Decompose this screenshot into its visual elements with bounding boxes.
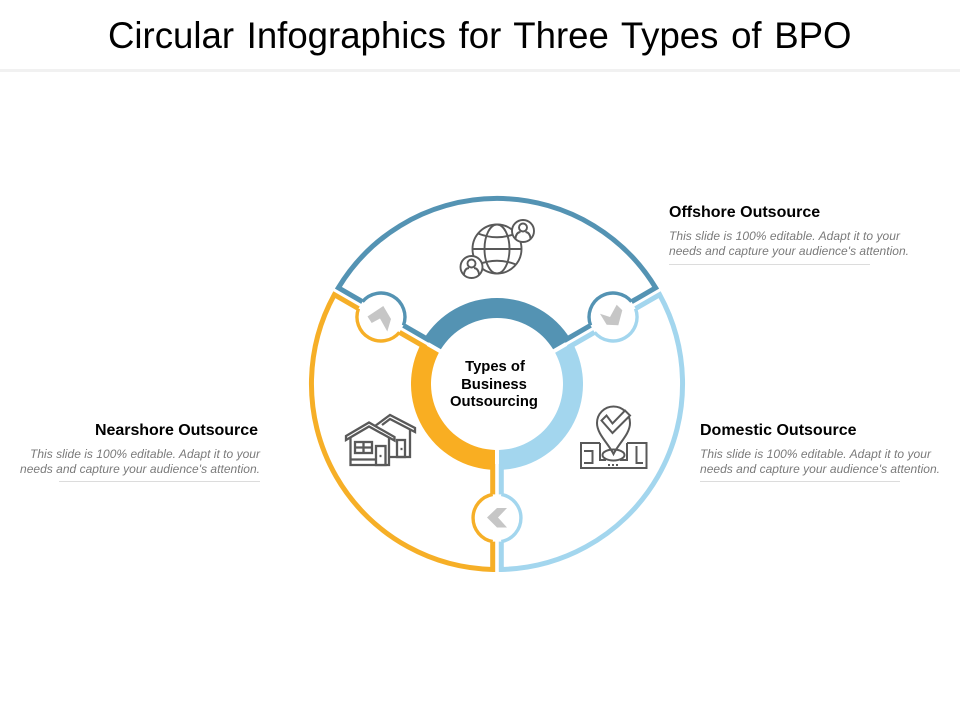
text block: offshore outsource: Offshore Outsource — [669, 204, 820, 221]
icon: two houses — [346, 415, 415, 465]
arrow: upper left chevron — [368, 306, 391, 332]
arrow: bottom chevron — [487, 508, 507, 528]
center label: Types of — [465, 359, 525, 375]
center label: Business — [461, 377, 527, 393]
center label — [450, 359, 538, 410]
text block: domestic outsource: needs and capture your audience's attention. — [700, 462, 940, 476]
text block: offshore outsource: This slide is 100% editable. Adapt it to your — [669, 229, 901, 243]
text block: offshore outsource: needs and capture your audience's attention. — [669, 244, 909, 258]
panel: offshore segment — [338, 198, 656, 349]
arrow: upper right chevron — [600, 305, 622, 325]
text block: nearshore outsource — [20, 422, 261, 482]
text block: nearshore outsource: needs and capture your audience's attention. — [20, 462, 260, 476]
center label: Outsourcing — [450, 394, 538, 410]
panel: nearshore segment — [311, 295, 495, 569]
title: Circular Infographics for Three Types of BPO — [108, 15, 852, 56]
panel: domestic segment — [499, 295, 683, 569]
icon: globe with users — [460, 220, 534, 278]
text block: offshore outsource — [669, 204, 909, 265]
icon: map pin with check — [581, 406, 646, 468]
text block: nearshore outsource: Nearshore Outsource — [95, 422, 258, 439]
text block: domestic outsource — [700, 422, 940, 482]
text block: domestic outsource: This slide is 100% editable. Adapt it to your — [700, 447, 932, 461]
text block: nearshore outsource: This slide is 100% editable. Adapt it to your — [30, 447, 261, 461]
text block: domestic outsource: Domestic Outsource — [700, 422, 857, 439]
